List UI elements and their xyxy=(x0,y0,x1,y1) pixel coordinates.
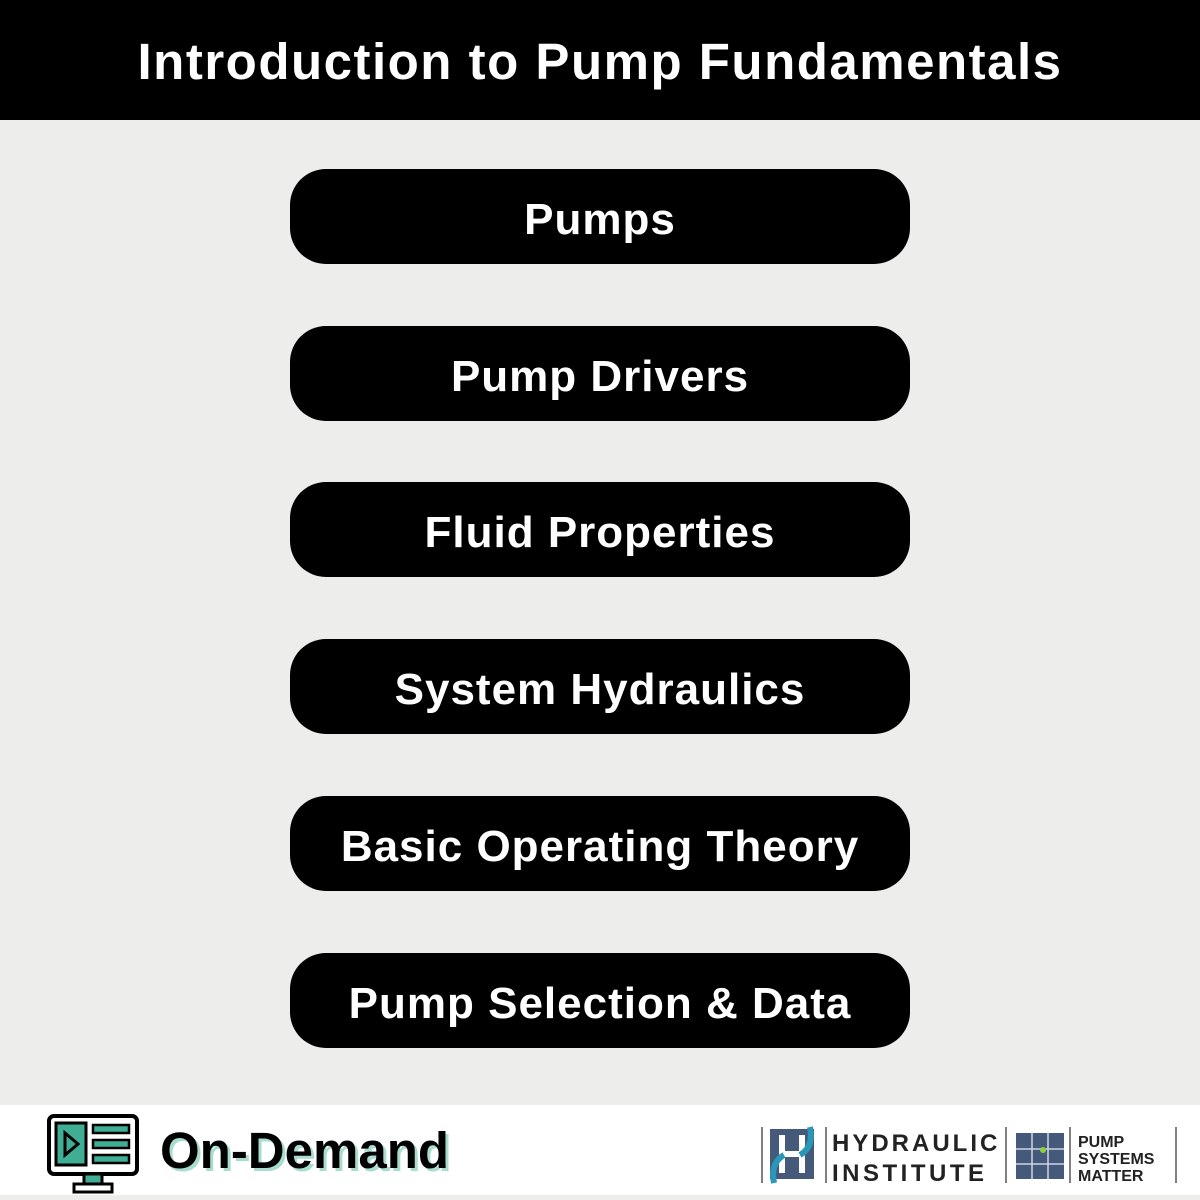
title: Introduction to Pump Fundamentals xyxy=(138,33,1062,90)
pill: Pumps: Pumps xyxy=(524,195,676,244)
pill: Basic Operating Theory xyxy=(290,796,910,891)
logo: Hydraulic Institute / Pump Systems Matter: SYSTEMS xyxy=(1078,1151,1155,1168)
pill: Pump Drivers: Pump Drivers xyxy=(451,352,749,401)
logo: Hydraulic Institute / Pump Systems Matter: MATTER xyxy=(1078,1168,1144,1185)
title xyxy=(0,0,1200,120)
pill: Pumps xyxy=(290,169,910,264)
logo: Hydraulic Institute / Pump Systems Matter: PUMP xyxy=(1078,1134,1125,1151)
pill: Fluid Properties: Fluid Properties xyxy=(425,508,775,557)
text: On-Demand: On-Demand xyxy=(160,1122,449,1179)
logo: Hydraulic Institute / Pump Systems Matter: INSTITUTE xyxy=(832,1160,988,1187)
pill: Pump Selection & Data xyxy=(290,953,910,1048)
pill: Basic Operating Theory: Basic Operating Theory xyxy=(341,822,859,871)
logo: Hydraulic Institute / Pump Systems Matter: HYDRAULIC xyxy=(832,1130,1000,1157)
pill: System Hydraulics: System Hydraulics xyxy=(395,665,805,714)
pill: Pump Selection & Data: Pump Selection & Data xyxy=(349,979,851,1028)
pill: Pump Drivers xyxy=(290,326,910,421)
icon: on-demand monitor xyxy=(47,1114,139,1194)
footer xyxy=(0,1105,1200,1195)
pill: Fluid Properties xyxy=(290,482,910,577)
logo: Hydraulic Institute / Pump Systems Matter xyxy=(761,1126,1177,1187)
pill: System Hydraulics xyxy=(290,639,910,734)
